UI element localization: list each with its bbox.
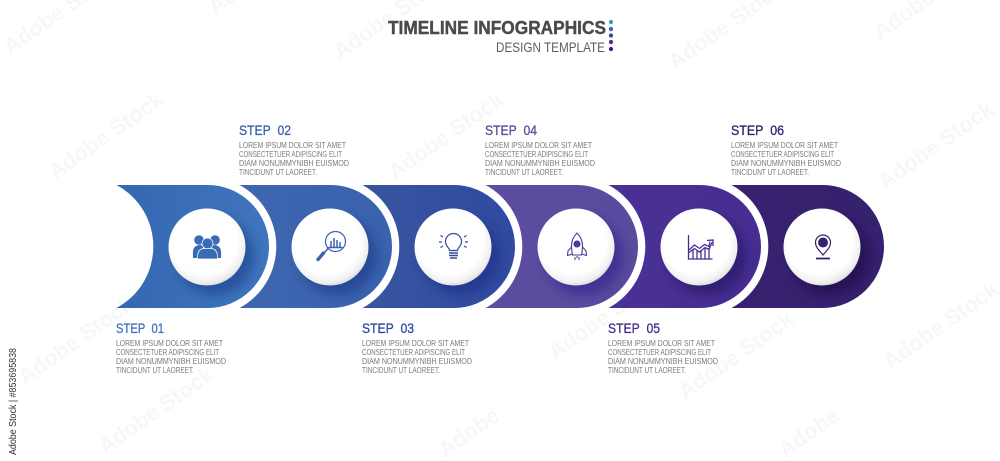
icon: map pin [816, 235, 830, 258]
panel: step 01 segment [116, 185, 269, 308]
text block: step 02: STEP 02 [239, 123, 291, 138]
text block: step 05: TINCIDUNT UT LAOREET. [608, 366, 686, 375]
text block: step 04: CONSECTETUER ADIPISCING ELIT [485, 150, 588, 159]
decorative dots [609, 20, 613, 51]
text block: step 02: LOREM IPSUM DOLOR SIT AMET [239, 141, 346, 150]
text block: step 05 [608, 321, 718, 375]
title block [388, 18, 613, 55]
text block: step 03 [362, 321, 472, 375]
background watermark: Adobe [434, 402, 504, 461]
text block: step 04 [485, 123, 595, 177]
text block: step 05: CONSECTETUER ADIPISCING ELIT [608, 348, 711, 357]
text block: step 03: CONSECTETUER ADIPISCING ELIT [362, 348, 465, 357]
background watermark: Adobe Stock [874, 96, 999, 194]
text block: step 03: TINCIDUNT UT LAOREET. [362, 366, 440, 375]
text block: step 06: TINCIDUNT UT LAOREET. [731, 168, 809, 177]
background watermark: Adobe [774, 402, 844, 461]
text block: step 06: LOREM IPSUM DOLOR SIT AMET [731, 141, 838, 150]
text block: step 03: STEP 03 [362, 321, 414, 336]
icon: people [193, 235, 221, 259]
text block: step 05: LOREM IPSUM DOLOR SIT AMET [608, 339, 715, 348]
text block: step 06: CONSECTETUER ADIPISCING ELIT [731, 150, 834, 159]
text block: step 01: LOREM IPSUM DOLOR SIT AMET [116, 339, 223, 348]
background watermark: Adobe Stock [544, 266, 669, 364]
background watermark: Adobe Stock [94, 361, 219, 459]
icon: growth chart [688, 235, 713, 259]
icon: rocket [568, 233, 586, 260]
text block: step 02: CONSECTETUER ADIPISCING ELIT [239, 150, 342, 159]
text block: step 04: DIAM NONUMMYNIBH EUISMOD [485, 159, 595, 168]
text block: step 02: TINCIDUNT UT LAOREET. [239, 168, 317, 177]
text block: step 05: STEP 05 [608, 321, 660, 336]
text block: step 06 [731, 123, 841, 177]
icon: magnifier with chart [318, 232, 346, 260]
text block: step 06: STEP 06 [731, 123, 784, 138]
text block: step 06: DIAM NONUMMYNIBH EUISMOD [731, 159, 841, 168]
text block: step 01: CONSECTETUER ADIPISCING ELIT [116, 348, 219, 357]
background watermark: Adobe Stock [14, 291, 139, 389]
text block: step 04: STEP 04 [485, 123, 537, 138]
text block: step 02 [239, 123, 349, 177]
background watermark: Adobe Stock [674, 306, 799, 404]
panel: step 02 segment [240, 185, 392, 308]
text block: step 01: TINCIDUNT UT LAOREET. [116, 366, 194, 375]
text block: step 01: STEP 01 [116, 321, 164, 336]
text block: step 03: LOREM IPSUM DOLOR SIT AMET [362, 339, 469, 348]
side credit: Adobe Stock | #853695838 [7, 348, 19, 455]
text block: step 02: DIAM NONUMMYNIBH EUISMOD [239, 159, 349, 168]
text block: step 04: TINCIDUNT UT LAOREET. [485, 168, 563, 177]
text block: step 01: DIAM NONUMMYNIBH EUISMOD [116, 357, 226, 366]
text block: step 01 [116, 321, 226, 375]
background watermark: Adobe Stock [384, 86, 509, 184]
subtitle: DESIGN TEMPLATE [496, 39, 605, 55]
panel: step 04 segment [486, 185, 638, 308]
panel: step 03 segment [362, 185, 515, 308]
background watermark: Adobe Stock [44, 86, 169, 184]
title: TIMELINE INFOGRAPHICS [388, 18, 606, 38]
background watermark: Adobe Stock [879, 276, 1000, 374]
icon: light bulb [439, 234, 468, 258]
text block: step 04: LOREM IPSUM DOLOR SIT AMET [485, 141, 592, 150]
panel: step 05 segment [608, 185, 761, 308]
text block: step 05: DIAM NONUMMYNIBH EUISMOD [608, 357, 718, 366]
text block: step 03: DIAM NONUMMYNIBH EUISMOD [362, 357, 472, 366]
panel: step 06 segment [732, 185, 884, 308]
